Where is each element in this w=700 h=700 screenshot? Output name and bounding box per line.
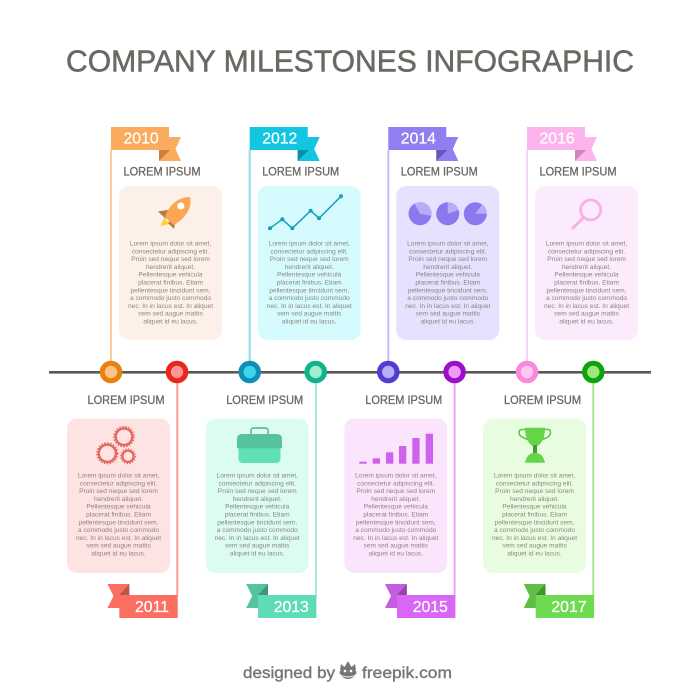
- footer credit: designed by: [243, 665, 335, 682]
- flag 2013: 2013: [274, 599, 309, 616]
- text block 2010: a commodo justo commodo: [130, 295, 211, 302]
- text block 2016: aliquet id eu lacus.: [559, 318, 614, 326]
- text block 2012: consectetur adipiscing elit.: [271, 248, 348, 255]
- title: COMPANY MILESTONES INFOGRAPHIC: [66, 44, 634, 78]
- icon: trophy: [519, 428, 550, 463]
- text block 2015: Pellentesque vehicula: [364, 504, 428, 511]
- text block 2010: Lorem ipsum dolor sit amet,: [130, 240, 211, 248]
- icon: freepik crown: [340, 661, 356, 679]
- text block 2013: Proin sed neque sed lorem: [218, 488, 297, 495]
- card 2014: [396, 186, 499, 340]
- text block 2015: placerat finibus. Etiam: [363, 512, 429, 518]
- text block 2012: nec. In in lacus est. In aliquet: [267, 303, 352, 310]
- flag 2013: [246, 584, 316, 618]
- text block 2011: sem sed augue mattis: [86, 543, 151, 550]
- text block 2016: placerat finibus. Etiam: [554, 280, 619, 286]
- text block 2012: Lorem ipsum dolor sit amet,: [269, 240, 350, 248]
- text block 2015: nec. In in lacus est. In aliquet: [353, 535, 438, 542]
- connector 2016: [526, 150, 528, 362]
- text block 2010: Pellentesque vehicula: [138, 272, 203, 279]
- text block 2010: placerat finibus. Etiam: [138, 280, 203, 286]
- text block 2013: nec. In in lacus est. In aliquet: [215, 535, 300, 542]
- text block 2015: hendrerit aliquet.: [371, 496, 421, 503]
- node 2013: [304, 361, 327, 383]
- text block 2017: Proin sed neque sed lorem: [495, 488, 574, 495]
- icon: briefcase: [237, 428, 282, 463]
- text block 2014: Proin sed neque sed lorem: [408, 256, 488, 263]
- text block 2017: pellentesque tincidunt sem,: [495, 519, 575, 526]
- connector 2012: [249, 150, 251, 362]
- flag 2011: 2011: [135, 599, 169, 616]
- text block 2013: Pellentesque vehicula: [225, 504, 290, 511]
- text block 2011: aliquet id eu lacus.: [91, 550, 146, 558]
- text block 2012: hendrerit aliquet.: [285, 264, 334, 271]
- text block 2015: aliquet id eu lacus.: [368, 550, 423, 558]
- card 2011: [67, 418, 170, 573]
- text block 2010: hendrerit aliquet.: [146, 264, 195, 271]
- text block 2012: Pellentesque vehicula: [277, 272, 342, 279]
- timeline axis: [49, 371, 651, 374]
- text block 2015: sem sed augue mattis: [364, 543, 429, 550]
- text block 2017: placerat finibus. Etiam: [502, 512, 567, 518]
- heading 2014: LOREM IPSUM: [401, 164, 478, 178]
- icon: magnifier: [572, 200, 601, 229]
- text block 2011: consectetur adipiscing elit.: [80, 480, 157, 487]
- connector 2017: [592, 382, 594, 596]
- card 2010: [119, 186, 222, 340]
- connector 2011: [176, 382, 178, 596]
- connector 2010: [110, 150, 112, 362]
- text block 2014: a commodo justo commodo: [407, 295, 489, 302]
- node 2010: [100, 361, 122, 383]
- text block 2016: a commodo justo commodo: [546, 295, 627, 302]
- flag 2015: 2015: [413, 599, 448, 616]
- text block 2015: consectetur adipiscing elit.: [357, 480, 435, 487]
- text block 2011: hendrerit aliquet.: [94, 496, 143, 503]
- node 2014: [377, 361, 400, 383]
- text block 2010: Proin sed neque sed lorem: [131, 256, 210, 263]
- flag 2015: [385, 584, 455, 618]
- text block 2013: a commodo justo commodo: [217, 527, 298, 534]
- milestone 2015: [344, 361, 466, 618]
- icon: gears: [97, 427, 135, 464]
- heading 2017: LOREM IPSUM: [504, 393, 581, 407]
- card 2017: [483, 418, 586, 573]
- text block 2015: Proin sed neque sed lorem: [356, 488, 436, 495]
- text block 2013: consectetur adipiscing elit.: [219, 480, 296, 487]
- node 2015: [443, 361, 466, 383]
- node 2017: [582, 361, 605, 383]
- connector 2013: [315, 382, 317, 596]
- flag 2014: [388, 127, 458, 161]
- flag 2010: [111, 127, 181, 161]
- text block 2013: pellentesque tincidunt sem,: [217, 519, 297, 526]
- text block 2012: placerat finibus. Etiam: [277, 280, 342, 286]
- milestone 2013: [206, 361, 327, 618]
- icon: pie charts: [408, 202, 487, 225]
- text block 2015: Lorem ipsum dolor sit amet,: [355, 472, 437, 480]
- text block 2016: sem sed augue mattis: [554, 311, 619, 318]
- flag 2012: [250, 127, 320, 161]
- text block 2016: Proin sed neque sed lorem: [547, 256, 626, 263]
- flag 2016: [527, 127, 597, 161]
- text block 2016: Lorem ipsum dolor sit amet,: [546, 240, 627, 248]
- heading 2010: LOREM IPSUM: [124, 164, 200, 178]
- text block 2010: consectetur adipiscing elit.: [132, 248, 209, 255]
- text block 2014: pellentesque tincidunt sem,: [408, 287, 488, 294]
- text block 2014: hendrerit aliquet.: [423, 264, 473, 271]
- flag 2016: 2016: [540, 130, 575, 148]
- heading 2013: LOREM IPSUM: [226, 393, 303, 407]
- card 2013: [206, 418, 309, 573]
- text block 2012: Proin sed neque sed lorem: [270, 256, 349, 263]
- text block 2017: sem sed augue mattis: [502, 543, 567, 550]
- text block 2012: pellentesque tincidunt sem,: [269, 287, 349, 294]
- text block 2017: hendrerit aliquet.: [510, 496, 559, 503]
- icon: rocket: [158, 197, 190, 229]
- text block 2016: pellentesque tincidunt sem,: [547, 287, 627, 294]
- text block 2011: pellentesque tincidunt sem,: [79, 519, 159, 526]
- text block 2012: aliquet id eu lacus.: [282, 318, 337, 326]
- text block 2017: Lorem ipsum dolor sit amet,: [494, 472, 575, 480]
- text block 2017: Pellentesque vehicula: [502, 504, 567, 511]
- text block 2011: placerat finibus. Etiam: [86, 512, 151, 518]
- icon: bar chart: [359, 434, 433, 464]
- node 2012: [238, 361, 261, 383]
- text block 2014: aliquet id eu lacus.: [420, 318, 475, 326]
- text block 2016: Pellentesque vehicula: [554, 272, 619, 279]
- text block 2015: pellentesque tincidunt sem,: [356, 519, 436, 526]
- text block 2010: pellentesque tincidunt sem,: [131, 287, 211, 294]
- flag 2010: 2010: [124, 130, 159, 148]
- text block 2014: sem sed augue mattis: [416, 311, 481, 318]
- node 2016: [516, 361, 538, 383]
- text block 2017: consectetur adipiscing elit.: [496, 480, 573, 487]
- node 2011: [166, 361, 188, 383]
- text block 2012: sem sed augue mattis: [277, 311, 342, 318]
- text block 2011: Proin sed neque sed lorem: [79, 488, 158, 495]
- text block 2011: a commodo justo commodo: [78, 527, 159, 534]
- icon: line chart: [268, 194, 343, 230]
- milestone 2012: [238, 127, 361, 383]
- text block 2017: a commodo justo commodo: [494, 527, 575, 534]
- text block 2013: placerat finibus. Etiam: [225, 512, 290, 518]
- text block 2017: aliquet id eu lacus.: [507, 550, 562, 558]
- text block 2011: Lorem ipsum dolor sit amet,: [78, 472, 159, 480]
- text block 2010: sem sed augue mattis: [138, 311, 203, 318]
- flag 2017: [524, 584, 594, 618]
- text block 2010: nec. In in lacus est. In aliquet: [128, 303, 213, 310]
- text block 2012: a commodo justo commodo: [269, 295, 350, 302]
- text block 2016: hendrerit aliquet.: [562, 264, 611, 271]
- text block 2011: Pellentesque vehicula: [86, 504, 151, 511]
- flag 2014: 2014: [401, 130, 436, 148]
- text block 2013: hendrerit aliquet.: [233, 496, 282, 503]
- flag 2012: 2012: [262, 130, 297, 148]
- milestone 2011: [67, 361, 188, 618]
- text block 2014: nec. In in lacus est. In aliquet: [405, 303, 490, 310]
- text block 2010: aliquet id eu lacus.: [143, 318, 198, 326]
- card 2016: [535, 186, 638, 340]
- milestone 2016: [516, 127, 638, 383]
- text block 2016: nec. In in lacus est. In aliquet: [544, 303, 629, 310]
- milestone 2014: [377, 127, 499, 383]
- connector 2015: [454, 382, 456, 596]
- text block 2016: consectetur adipiscing elit.: [548, 248, 625, 255]
- text block 2015: a commodo justo commodo: [355, 527, 437, 534]
- text block 2011: nec. In in lacus est. In aliquet: [76, 535, 161, 542]
- heading 2011: LOREM IPSUM: [88, 393, 164, 407]
- text block 2013: Lorem ipsum dolor sit amet,: [217, 472, 298, 480]
- footer credit: freepik.com: [362, 665, 452, 682]
- text block 2014: placerat finibus. Etiam: [415, 280, 481, 286]
- heading 2012: LOREM IPSUM: [262, 164, 339, 178]
- text block 2014: Lorem ipsum dolor sit amet,: [407, 240, 489, 248]
- milestone 2010: [100, 127, 222, 383]
- text block 2014: Pellentesque vehicula: [416, 272, 480, 279]
- flag 2017: 2017: [551, 599, 587, 616]
- card 2015: [344, 418, 447, 573]
- text block 2013: aliquet id eu lacus.: [230, 550, 285, 558]
- milestone 2017: [483, 361, 605, 618]
- heading 2015: LOREM IPSUM: [365, 393, 442, 407]
- footer credit: [243, 661, 452, 682]
- heading 2016: LOREM IPSUM: [540, 164, 616, 178]
- flag 2011: [108, 584, 178, 618]
- text block 2014: consectetur adipiscing elit.: [409, 248, 487, 255]
- card 2012: [258, 186, 361, 340]
- connector 2014: [387, 150, 389, 362]
- text block 2013: sem sed augue mattis: [225, 543, 290, 550]
- text block 2017: nec. In in lacus est. In aliquet: [492, 535, 577, 542]
